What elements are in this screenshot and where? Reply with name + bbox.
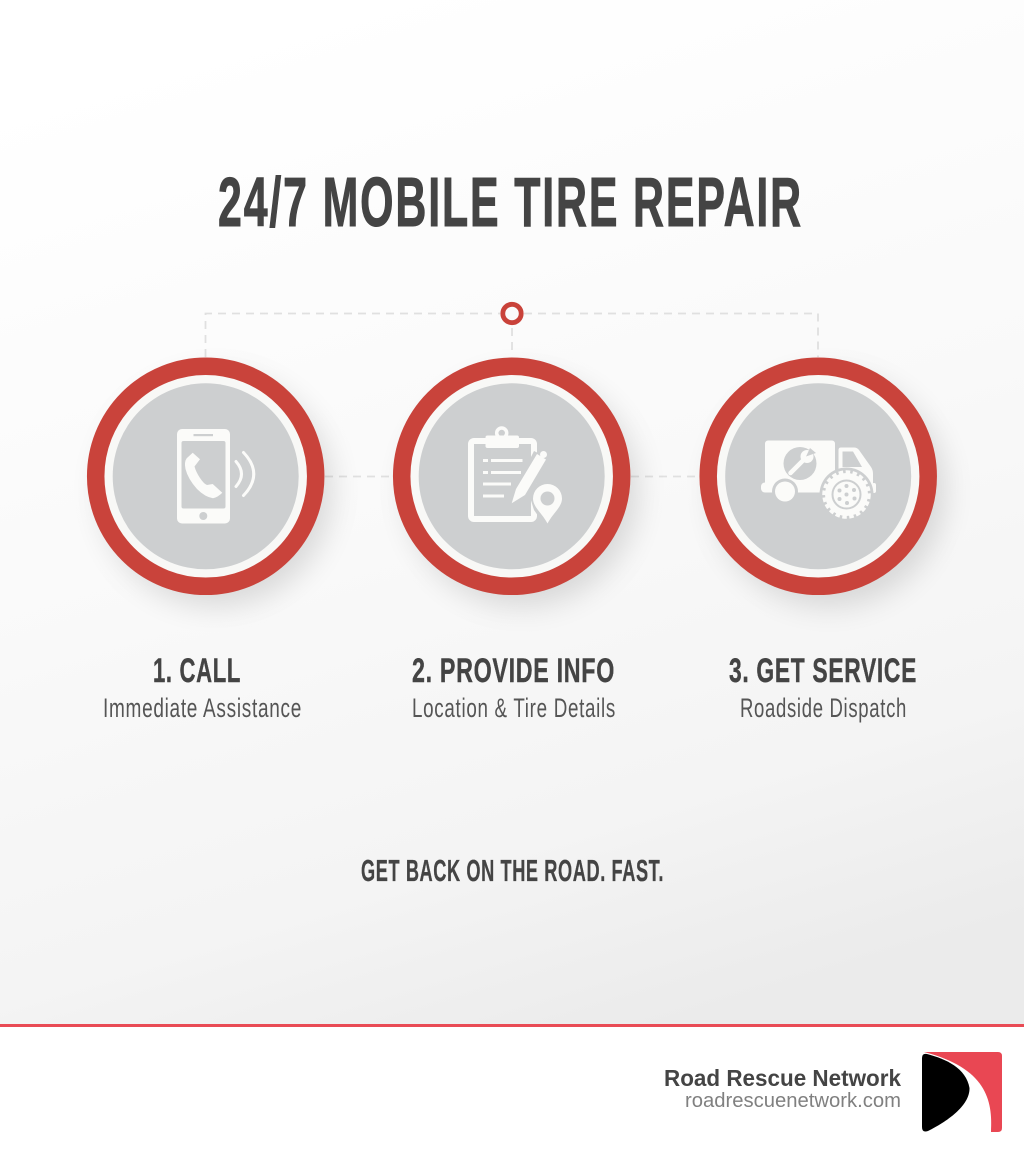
icon: clipboard with pencil and pin — [471, 428, 566, 530]
step 2 label — [412, 652, 616, 723]
step 3 description: Roadside Dispatch — [740, 693, 907, 723]
footer brand name: Road Rescue Network — [664, 1065, 902, 1091]
step 1 description: Immediate Assistance — [103, 693, 302, 723]
icon: phone — [177, 429, 254, 524]
icon: service truck with tire — [761, 440, 876, 522]
step 1 label: 1. CALL — [153, 652, 241, 690]
step 1 circle with phone icon — [96, 366, 332, 606]
connector lines — [206, 314, 818, 476]
footer rule — [0, 1024, 1024, 1027]
step 2 circle with clipboard icon — [402, 366, 638, 606]
step 1 label — [103, 652, 302, 723]
step 3 label — [729, 652, 917, 723]
step 3 circle with truck icon — [708, 366, 945, 606]
step 3 label: 3. GET SERVICE — [729, 652, 917, 690]
connector node — [503, 304, 521, 323]
logo — [922, 1052, 1002, 1132]
tagline: GET BACK ON THE ROAD. FAST. — [361, 853, 664, 888]
step 2 description: Location & Tire Details — [412, 693, 616, 723]
step 2 label: 2. PROVIDE INFO — [412, 652, 615, 690]
footer url: roadrescuenetwork.com — [685, 1090, 901, 1112]
